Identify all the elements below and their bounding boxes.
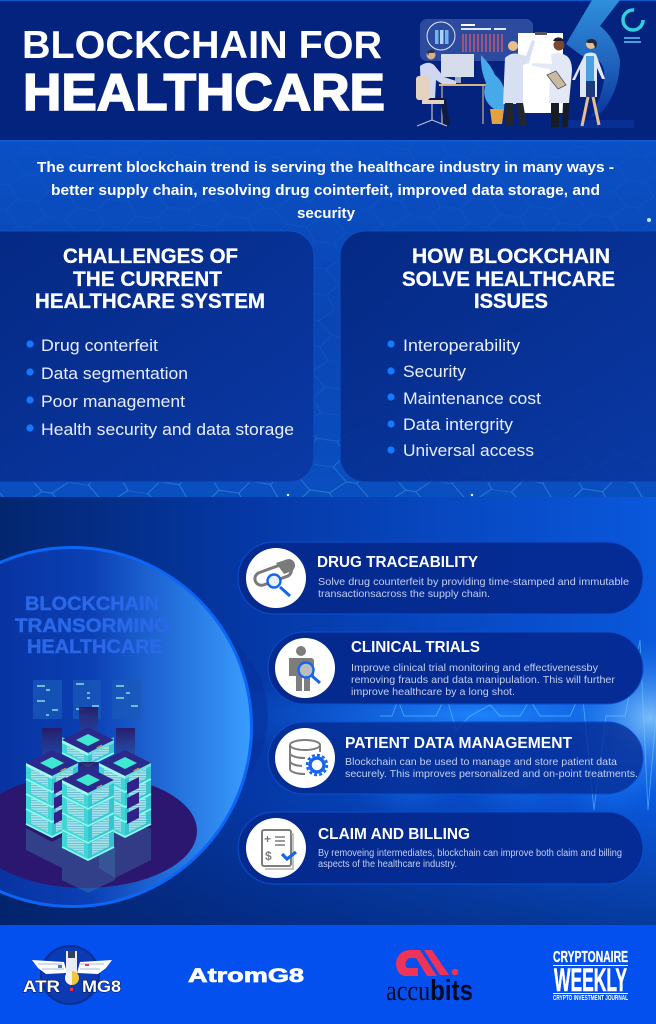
circle: blockchain transforming healthcare	[0, 548, 252, 906]
card: drug traceability	[238, 542, 643, 614]
bullet list: solutions: Universal access	[403, 441, 534, 460]
bullet list: solutions	[387, 336, 541, 460]
icon: person and magnifier	[275, 638, 335, 698]
bullet list: challenges	[26, 336, 294, 439]
bullet list: challenges: Health security and data storage	[41, 420, 294, 439]
card text: removing frauds and data manipulation. This will further	[351, 675, 616, 686]
platform disc	[0, 774, 197, 888]
card text	[351, 663, 616, 698]
card title: DRUG TRACEABILITY	[317, 554, 479, 571]
logo: AtromG8 wordmark: AtromG8	[188, 966, 304, 987]
panel: solutions	[340, 231, 656, 482]
icon: capsule and magnifier	[246, 548, 306, 608]
stack: front	[62, 767, 114, 860]
plant	[481, 55, 505, 124]
microscope backdrop	[566, 0, 634, 128]
card text	[345, 757, 638, 780]
panel heading: solutions	[402, 245, 615, 313]
card title: CLINICAL TRIALS	[351, 639, 480, 656]
seated doctor at desk	[416, 49, 491, 126]
card text: securely. This improves personalized and on-point treatments.	[345, 769, 638, 780]
stack: left	[26, 750, 78, 837]
doctor 2	[532, 37, 572, 127]
beam: right	[116, 728, 135, 755]
panel heading: challenges: HEALTHCARE SYSTEM	[35, 290, 265, 313]
reflections	[26, 828, 115, 893]
panel heading: solutions: ISSUES	[474, 290, 548, 313]
icon: bill and check	[246, 818, 306, 878]
bullet list: solutions: Maintenance cost	[403, 389, 541, 408]
title: BLOCKCHAIN FOR	[22, 24, 382, 67]
bullet list: challenges: Poor management	[41, 392, 185, 411]
panel heading: challenges: CHALLENGES OF	[63, 245, 238, 268]
title: HEALTHCARE	[23, 64, 385, 122]
card text: transactionsacross the supply chain.	[318, 589, 490, 600]
panel heading: solutions: HOW BLOCKCHAIN	[412, 245, 610, 268]
logo: ATROMG8 emblem	[23, 946, 121, 1004]
beam: back	[79, 707, 98, 732]
doctor 3	[572, 39, 605, 126]
intro text: The current blockchain trend is serving the healthcare industry in many ways -	[37, 159, 614, 176]
server illustration	[0, 680, 197, 893]
whiteboard	[518, 32, 563, 113]
card: patient data management	[268, 722, 643, 794]
beam: front	[79, 762, 98, 772]
header illustration: medical team	[416, 0, 643, 128]
card text	[318, 577, 629, 600]
data sheets	[33, 680, 141, 719]
header band	[0, 0, 656, 142]
panel heading: challenges	[35, 245, 265, 313]
circle heading: HEALTHCARE	[27, 636, 163, 658]
card text: Improve clinical trial monitoring and effectivenessby	[351, 663, 599, 674]
card text: By removeing intermediates, blockchain can improve both claim and billing	[318, 848, 622, 859]
circle heading: TRANSORMING	[15, 615, 170, 637]
logo: accubits: accubits	[386, 975, 473, 1007]
card: clinical trials	[268, 632, 643, 704]
card text: Blockchain can be used to manage and store patient data	[345, 757, 617, 768]
intro text	[37, 159, 614, 222]
intro text: security	[297, 205, 356, 222]
bullet list: solutions: Interoperability	[403, 336, 521, 355]
panel heading: solutions: SOLVE HEALTHCARE	[402, 268, 615, 291]
footer band	[0, 925, 656, 1024]
panel: challenges	[0, 231, 314, 482]
lower section background	[0, 497, 656, 925]
stack: right	[99, 750, 151, 837]
dashboard panel	[420, 19, 533, 61]
doctor 1	[503, 40, 535, 126]
circle heading: BLOCKCHAIN	[25, 593, 159, 615]
logo: Cryptonaire Weekly	[553, 949, 628, 1002]
card: claim and billing	[238, 812, 643, 884]
logo: ATROMG8 emblem: MG8	[82, 977, 121, 996]
intro section background	[0, 141, 656, 498]
card text: aspects of the healthcare industry.	[318, 859, 457, 870]
logo: accubits	[386, 950, 473, 1007]
card title: CLAIM AND BILLING	[318, 826, 470, 843]
bullet list: solutions: Data intergrity	[403, 415, 514, 434]
beam: left	[42, 728, 62, 755]
circle heading	[15, 593, 170, 658]
card title: PATIENT DATA MANAGEMENT	[345, 735, 573, 752]
bullet list: challenges: Data segmentation	[41, 364, 188, 383]
panel heading: challenges: THE CURRENT	[73, 268, 222, 291]
stack: back	[62, 727, 114, 766]
card text: Solve drug counterfeit by providing time-stamped and immutable	[318, 577, 629, 588]
bullet list: solutions: Security	[403, 362, 466, 381]
card text: improve healthcare by a long shot.	[351, 687, 515, 698]
title	[22, 24, 385, 122]
logo: ATROMG8 emblem: ATR	[23, 977, 60, 996]
icon: bill and check: +	[264, 832, 271, 846]
ring icon	[623, 10, 643, 43]
icon: bill and check: $	[265, 849, 272, 863]
card text	[318, 848, 622, 870]
intro text: better supply chain, resolving drug cointerfeit, improved data storage, and	[51, 182, 600, 199]
icon: database and gear	[275, 728, 335, 788]
bullet list: challenges: Drug conterfeit	[41, 336, 158, 355]
